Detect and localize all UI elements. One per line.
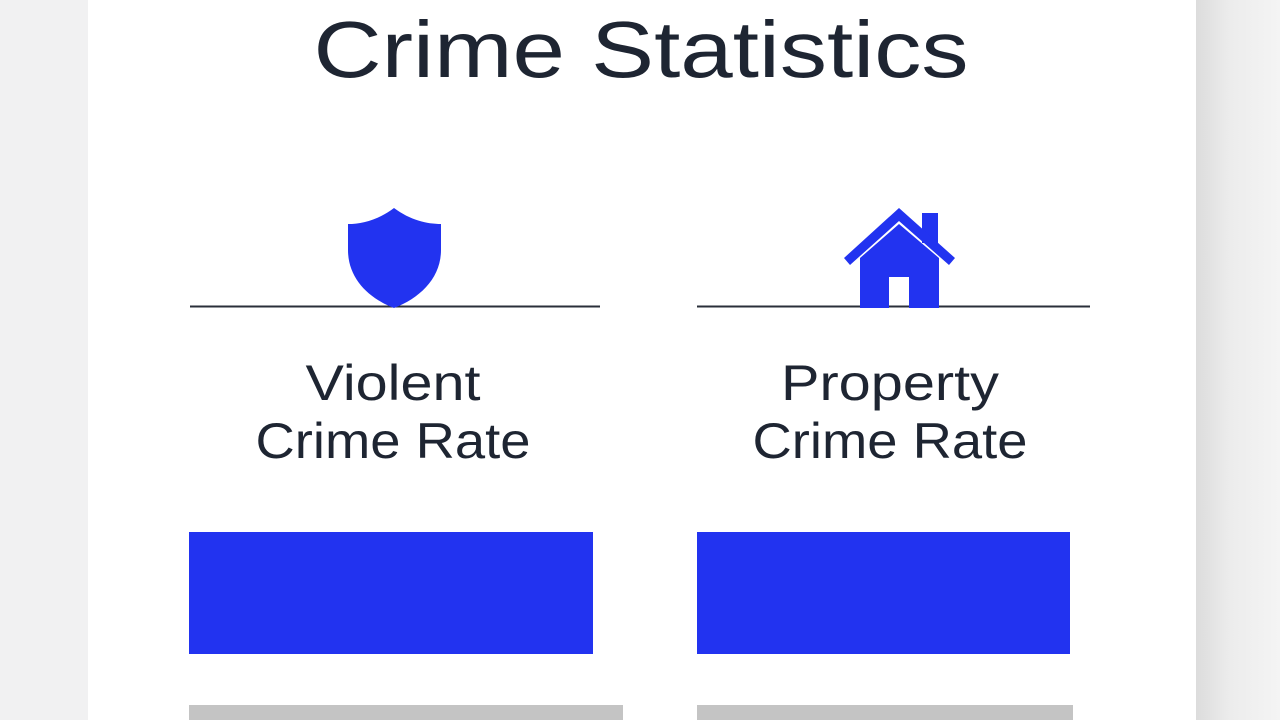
bar: violent gray [189, 705, 623, 720]
panel: violent crime [189, 208, 623, 720]
bar: property gray [697, 705, 1073, 720]
title: Crime Statistics [314, 5, 968, 94]
label: violent crime rate [256, 355, 530, 469]
label: property crime rate: Crime Rate [752, 413, 1028, 469]
bar: property [697, 532, 1070, 654]
panel: property crime [697, 208, 1090, 720]
label: property crime rate [752, 355, 1028, 469]
label: property crime rate: Property [781, 355, 999, 411]
icon: house [844, 208, 955, 308]
label: violent crime rate: Crime Rate [256, 413, 530, 469]
bar: violent [189, 532, 593, 654]
label: violent crime rate: Violent [306, 355, 481, 411]
icon: shield [348, 208, 441, 308]
